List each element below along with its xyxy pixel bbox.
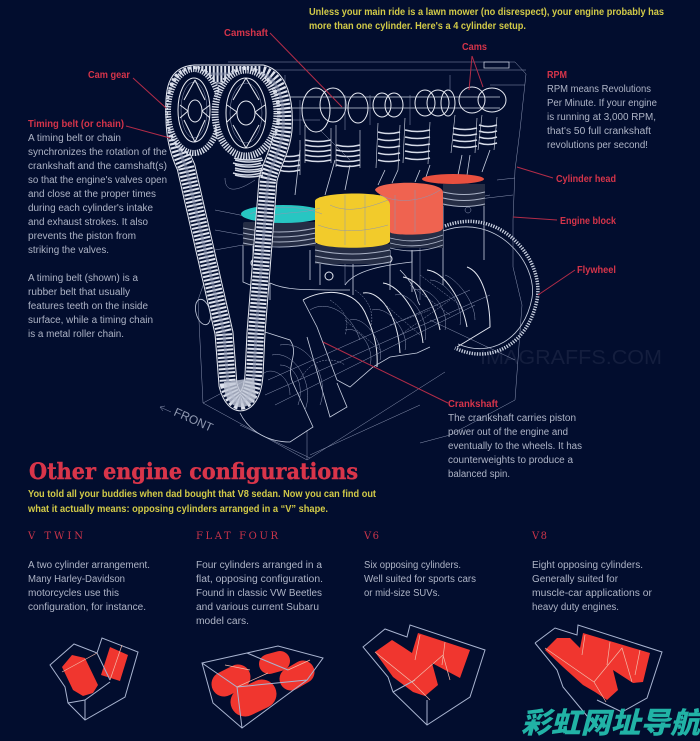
timing belt text block: Timing belt (or chain) xyxy=(28,119,124,130)
RPM text block xyxy=(547,70,657,151)
column: flat four: Found in classic VW Beetles xyxy=(196,588,322,599)
crankshaft text block: counterweights to produce a xyxy=(448,455,573,466)
timing belt text block: prevents the piston from xyxy=(28,231,136,242)
column: flat four: and various current Subaru xyxy=(196,602,319,613)
column: V twin: V TWIN xyxy=(27,531,84,542)
cylinder 4: red disc xyxy=(422,174,484,184)
column: V6: Well suited for sports cars xyxy=(364,574,476,585)
camshaft and cams xyxy=(225,87,506,189)
column: V twin: motorcycles use this xyxy=(28,588,119,599)
timing belt text block: striking the valves. xyxy=(28,245,109,256)
column: V twin: A two cylinder arrangement. xyxy=(28,560,150,571)
crankshaft text block: Crankshaft xyxy=(448,399,499,410)
label: cams: Cams xyxy=(462,42,487,53)
timing belt text block: surface, while a timing chain xyxy=(28,315,153,326)
cylinder 1: cyan disc xyxy=(241,205,325,223)
column: V8: muscle-car applications or xyxy=(532,588,653,599)
timing belt xyxy=(175,74,283,407)
timing belt text block: rubber belt that usually xyxy=(28,287,130,298)
engine block outline xyxy=(198,62,526,460)
label: engine block: Engine block xyxy=(560,216,616,227)
column: V twin: configuration, for instance. xyxy=(28,602,146,613)
column: V6: Six opposing cylinders. xyxy=(364,560,461,571)
flywheel xyxy=(443,221,538,354)
right cam gear xyxy=(215,70,277,156)
RPM text block: RPM means Revolutions xyxy=(547,84,651,95)
column: V twin: Many Harley-Davidson xyxy=(28,574,125,585)
column: flat four: Four cylinders arranged in a xyxy=(196,560,322,571)
piston skirts and rods xyxy=(243,150,490,305)
column: V8: V8 xyxy=(531,531,548,542)
crankshaft text block: power out of the engine and xyxy=(448,427,568,438)
watermark: site name behind engine: IMAGRAFFS.COM xyxy=(480,347,662,369)
intro text xyxy=(309,7,664,32)
diagram: flat four engine xyxy=(202,646,323,728)
diagram: V twin engine xyxy=(50,638,138,720)
piston 3 rings xyxy=(390,228,443,251)
label: camshaft: Camshaft xyxy=(224,28,269,39)
leader lines xyxy=(126,33,575,403)
column: V8: Generally suited for xyxy=(532,574,619,585)
valve springs xyxy=(233,115,497,175)
gear spring under right gear xyxy=(235,160,263,177)
tensioner pulley xyxy=(193,298,213,326)
column: flat four: model cars. xyxy=(196,616,249,627)
column: V twin xyxy=(27,531,150,720)
cylinder 3: orange piston xyxy=(375,183,443,235)
column: V6: or mid-size SUVs. xyxy=(364,588,440,599)
piston 4 rings xyxy=(443,184,485,206)
timing belt text block: crankshaft and the camshaft(s) xyxy=(28,161,167,172)
column: V6: V6 xyxy=(363,531,380,542)
timing belt text block: A timing belt (shown) is a xyxy=(28,273,138,284)
column: flat four: FLAT FOUR xyxy=(196,531,279,542)
engine wireframe illustration xyxy=(168,62,538,460)
intro text: Unless your main ride is a lawn mower (no disrespect), your engine probably has xyxy=(309,7,664,18)
piston 2 rings xyxy=(315,244,390,266)
timing belt text block: and close at the proper times xyxy=(28,189,156,200)
section intro xyxy=(27,489,377,515)
watermark: site name: 彩虹网址导航 xyxy=(521,700,700,741)
label: cylinder head: Cylinder head xyxy=(556,174,616,185)
piston 1 rings xyxy=(243,222,316,247)
section intro: You told all your buddies when dad bought that V8 sedan. Now you can find out xyxy=(28,489,377,500)
left cam gear xyxy=(168,69,220,153)
column: flat four: flat, opposing configuration. xyxy=(196,574,323,585)
RPM text block: is running at 3,000 RPM, xyxy=(547,112,656,123)
crankshaft text block xyxy=(448,399,582,480)
crankshaft text block: balanced spin. xyxy=(448,469,510,480)
diagram: V8 engine xyxy=(535,625,662,728)
RPM text block: revolutions per second! xyxy=(547,140,648,151)
RPM text block: RPM xyxy=(547,70,567,81)
RPM text block: Per Minute. If your engine xyxy=(547,98,657,109)
column: V8: heavy duty engines. xyxy=(532,602,619,613)
column: V8 xyxy=(531,531,662,728)
label: flywheel: Flywheel xyxy=(577,265,616,276)
cylinder 2: yellow piston xyxy=(315,193,390,248)
timing belt text block: features teeth on the inside xyxy=(28,301,148,312)
column: V8: Eight opposing cylinders. xyxy=(532,560,643,571)
timing belt text block: is a metal roller chain. xyxy=(28,329,124,340)
column: V6 xyxy=(363,531,485,725)
timing belt text block: synchronizes the rotation of the xyxy=(28,147,167,158)
crankshaft xyxy=(240,250,490,442)
section intro: what it actually means: opposing cylinders arranged in a “V” shape. xyxy=(27,504,328,515)
column: flat four xyxy=(196,531,323,728)
timing belt text block xyxy=(28,119,167,340)
label: cam gear: Cam gear xyxy=(88,70,130,81)
crankshaft text block: The crankshaft carries piston xyxy=(448,413,576,424)
RPM text block: that's 50 full crankshaft xyxy=(547,126,651,137)
crankshaft text block: eventually to the wheels. It has xyxy=(448,441,582,452)
heading: other engine configurations: Other engine configurations xyxy=(29,459,358,485)
wire overlay on pistons xyxy=(250,190,440,245)
timing belt text block: and exhaust strokes. It also xyxy=(28,217,148,228)
intro text: more than one cylinder. Here's a 4 cylinder setup. xyxy=(309,21,526,32)
diagram: V6 engine xyxy=(363,625,485,725)
timing belt text block: during each cylinder's intake xyxy=(28,203,153,214)
front arrow label: FRONT xyxy=(172,405,216,435)
timing belt text block: A timing belt or chain xyxy=(28,133,121,144)
timing belt text block: so that the engine's valves open xyxy=(28,175,167,186)
